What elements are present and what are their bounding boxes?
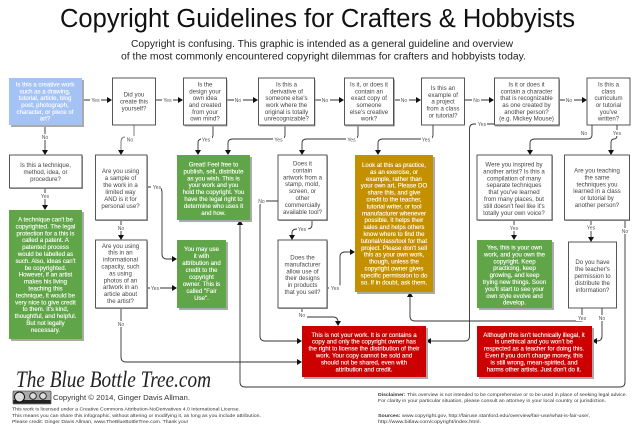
question: informational capacity: capacity, such	[101, 264, 140, 270]
question: informational capacity	[96, 240, 148, 309]
intro text: of the most commonly encountered copyright dilemmas for crafters and hobbyists today.	[121, 52, 526, 62]
gold result: practice: your own art. Please DO	[361, 183, 427, 190]
gold result: practice: copyright owner gives	[365, 266, 423, 272]
question: technique: Is this a technique,	[20, 162, 71, 169]
question: teaching: learned in a class	[573, 188, 621, 195]
connector labels: Yes	[202, 138, 211, 144]
green result: technique: patented process	[22, 244, 69, 251]
green result: your own work: Yes, this is your own	[487, 244, 542, 252]
question: technique: procedure?	[30, 176, 62, 183]
question: sample for personal use	[96, 155, 148, 221]
question: derivative: Is this a	[276, 82, 298, 88]
license text: This means you can share this infographic, without altering or modifying it, as long as you include attribution.	[12, 413, 261, 419]
green result: fair use: You may use	[184, 246, 220, 253]
green result: great: and how.	[201, 210, 226, 217]
connector labels: No	[42, 135, 48, 141]
question: did you create this: yourself?	[122, 106, 147, 112]
question: stamp or mold: artwork from a	[283, 174, 323, 181]
disclaimer: Disclaimer: This overview is not intended to be comprehensive or to be used in place of seeking legal advice.	[378, 392, 627, 398]
question: technique: method, idea, or	[23, 169, 68, 176]
question: inspired: still doesn't feel like it's	[483, 203, 545, 210]
question: own design	[184, 78, 228, 126]
question: manufacturer: allow use of	[286, 268, 319, 275]
connector labels: No	[299, 313, 305, 319]
connector labels: No	[322, 98, 328, 104]
connector labels: Yes	[422, 138, 431, 144]
arrowheads	[42, 97, 614, 365]
green result: your own work: practicing, keep	[493, 265, 536, 272]
start box: creative work: tutorial, article, blog	[19, 95, 71, 102]
disclaimer: For clarity in your particular situation, please consult an attorney in your local country or jurisdiction.	[378, 398, 606, 404]
gold result: practice: Look at this as practice,	[362, 162, 426, 169]
question: inspired: from many places, but	[484, 196, 544, 203]
connector labels: No	[118, 322, 124, 328]
connector labels: No	[118, 226, 124, 232]
question: stamp or mold: available tool?	[283, 209, 323, 216]
gold result: practice: share this, and give	[368, 190, 421, 197]
question: stamp or mold: screen, or	[289, 188, 316, 195]
gold result: practice: as an exercise, or	[370, 169, 418, 176]
license text: This work is licensed under a Creative Commons Attribution-NoDerivatives 4.0 International License.	[12, 406, 240, 412]
red result: not your work: copy and only the copyright owner has	[312, 339, 416, 346]
question: manufacturer: that you sell?	[285, 289, 321, 296]
question: sample for personal use: AND is it for	[104, 196, 137, 203]
question: exact copy: Is it, or does it	[350, 82, 388, 88]
question: recognizable character: (e.g. Mickey Mouse)	[499, 116, 554, 123]
question: exact copy: exact copy of	[351, 95, 387, 102]
question: class curriculum: you've	[600, 109, 618, 116]
red result: unethical	[477, 326, 594, 379]
question: class project	[422, 78, 464, 125]
question: inspired: Were you inspired by	[485, 162, 544, 168]
start box: creative work: art?	[40, 116, 51, 123]
question: own design: design your	[189, 88, 221, 95]
question: sample for personal use: personal use?	[101, 203, 140, 210]
connector labels: No	[581, 131, 587, 137]
green result: technique: be copyrighted.	[25, 265, 67, 272]
question: sample for personal use: limited way	[105, 189, 137, 196]
gold result: practice: possible. It helps their	[365, 217, 423, 224]
question: informational capacity: informational	[103, 257, 138, 264]
license text	[12, 406, 261, 425]
green result: your own work: trying new things. Soon	[483, 279, 546, 286]
connector labels: Yes	[153, 185, 162, 191]
disclaimer	[378, 392, 627, 404]
green result: fair use: copyright	[189, 274, 214, 281]
question: class project: or tutorial?	[429, 112, 458, 119]
red result: unethical: harms other artists. Just don't do it.	[487, 366, 582, 373]
question: derivative: original is totally	[265, 109, 309, 116]
question: did you create this	[112, 78, 156, 125]
question: own design: own idea	[193, 95, 218, 102]
question: informational capacity: artwork in an	[103, 284, 138, 291]
start box: creative work: Is this a creative work	[16, 82, 75, 88]
green result: great: publish, sell, distribute	[184, 168, 244, 175]
question: own design: and created	[189, 102, 221, 109]
question: stamp or mold: Does it	[293, 160, 312, 168]
question: stamp or mold: stamp, mold,	[285, 181, 320, 188]
question: teaching: the same	[584, 174, 610, 181]
question: inspired: that you've learned	[488, 189, 540, 196]
question: exact copy	[344, 78, 395, 126]
question: informational capacity: article about	[104, 291, 137, 298]
connector labels: Yes	[274, 138, 283, 144]
green result: great: Great! Feel free to	[189, 162, 239, 168]
question: teacher permission: permission to	[574, 273, 611, 280]
question: teaching: another person?	[575, 202, 620, 209]
start box: creative work	[9, 78, 84, 127]
sources: Sources: www.copyright.gov, http://fairuse.stanford.edu/overview/fair-use/what-is-fair-use/,	[378, 413, 590, 419]
red result: unethical: respected as a teacher for doing this.	[484, 346, 584, 353]
green result: your own work: growing, and keep	[490, 272, 540, 279]
question: inspired: another artist? Is this a	[483, 168, 545, 175]
connector labels: Yes	[298, 227, 307, 233]
green result: fair use: Use".	[194, 295, 209, 302]
question: recognizable character: that is recognizable	[500, 95, 553, 102]
question: class curriculum: written?	[597, 116, 620, 123]
green result: your own work: develop.	[503, 300, 526, 307]
green result: your own work: own style evolve and	[486, 293, 543, 300]
gold result: practice: know where to find the	[364, 231, 425, 238]
question: manufacturer: Does the	[290, 254, 315, 262]
green result: fair use: credit to the	[186, 267, 218, 274]
question: sample for personal use: the work in a	[103, 182, 138, 189]
red result: not your work	[302, 326, 428, 379]
green result: technique: However, if an artist	[19, 272, 73, 279]
green result: technique: copyrighted. The legal	[16, 223, 75, 230]
question: teaching: or tutorial by	[580, 195, 615, 202]
question: inspired: compilation of many	[487, 175, 542, 182]
connector labels	[40, 97, 629, 328]
question: stamp or mold: other	[296, 195, 309, 202]
green result: technique: called a patent. A	[22, 237, 70, 244]
green result: great	[177, 155, 252, 222]
green result: great: have the legal right to	[184, 196, 243, 203]
question: informational capacity: Are you using	[102, 243, 139, 250]
question: exact copy: work?	[360, 116, 378, 123]
license text: Please credit: Ginger Davis Allman, www.TheBlueBottleTree.com. Thank you!	[12, 419, 188, 425]
question: own design: from your	[192, 109, 218, 116]
question: sample for personal use: a sample of	[105, 175, 137, 182]
red result: not your work: work. Your copy cannot be sold and	[315, 352, 412, 360]
question: stamp or mold	[278, 155, 328, 221]
question: teacher permission: Do you have	[575, 259, 610, 266]
question: teacher permission: information?	[576, 287, 610, 294]
connector labels: No	[258, 199, 265, 205]
connector labels: Yes	[91, 98, 100, 104]
gold result: practice: tutorial/class/tool for that	[361, 238, 427, 245]
green result: your own work: work, and you own the	[483, 251, 546, 258]
green result: great: your work and you	[189, 182, 238, 189]
question: exact copy: else's creative	[350, 109, 389, 116]
connector labels: No	[599, 316, 605, 322]
question: recognizable character	[494, 78, 560, 126]
question: informational capacity: as using	[109, 270, 132, 277]
start box: creative work: post, photograph,	[21, 102, 69, 109]
green result: great: hold the copyright. You	[183, 189, 244, 196]
green result: technique: thoughtful, and helpful.	[15, 313, 77, 320]
green result: technique: such. Also, ideas can't	[15, 258, 76, 265]
sources: http://www.bitlaw.com/copyright/index.html.	[378, 419, 481, 425]
gold result: practice: manufacturer whenever	[362, 210, 426, 217]
question: informational capacity: photos of an	[104, 277, 137, 284]
red result: unethical: Although this isn't technically illegal, it	[483, 332, 585, 339]
question: derivative: unrecognizable?	[264, 116, 309, 123]
green result: fair use: it with	[194, 253, 209, 260]
connector labels: No	[566, 98, 572, 104]
question: class curriculum: class	[602, 88, 615, 95]
question: class project: a project	[431, 99, 455, 106]
gold result: practice: specific permission to do	[361, 272, 428, 279]
question: class project: Is this an	[431, 85, 455, 92]
question: manufacturer: their designs	[285, 275, 320, 282]
question: manufacturer: manufacturer	[285, 261, 320, 268]
green result: technique: protection for a this is	[17, 230, 74, 237]
green result: great: as you wish. This is	[187, 175, 240, 182]
question: recognizable character: another person?	[504, 109, 549, 116]
question: derivative	[258, 78, 316, 126]
gold result: practice: so. If in doubt, ask them.	[361, 279, 428, 286]
connector labels: Yes	[151, 286, 160, 292]
gold result: practice: tutorial writer, or tool	[367, 203, 421, 210]
connector labels: No	[401, 98, 407, 104]
intro text	[121, 39, 526, 62]
question: class project: from a class	[427, 106, 459, 112]
question: class curriculum	[587, 78, 630, 125]
connector labels: Yes	[587, 226, 596, 232]
question: stamp or mold: contain	[293, 167, 312, 174]
green result: fair use: called "Fair	[186, 288, 217, 295]
question: recognizable character: Is it or does it	[508, 82, 545, 88]
green result: technique: technique, it would be	[16, 292, 76, 299]
connector labels: Yes	[578, 316, 587, 322]
question: class curriculum: curriculum	[594, 95, 623, 102]
question: class curriculum: Is this a	[598, 82, 620, 88]
green result: fair use: attribution and	[182, 260, 221, 267]
green result: your own work: you'll start to see your	[485, 286, 544, 293]
green result: your own work	[477, 240, 554, 310]
question: teaching: Are you teaching	[574, 168, 620, 174]
question: derivative: derivative of	[270, 88, 303, 95]
red result: unethical: Even if you don't charge money, this	[485, 352, 583, 360]
icon: creative commons badge	[13, 391, 51, 404]
question: sample for personal use: Are you using	[102, 168, 139, 175]
question: exact copy: someone	[356, 102, 382, 109]
question: inspired: totally your own voice?	[483, 210, 545, 217]
question: derivative: someone else's	[265, 95, 308, 102]
question: teacher permission: the teacher's	[575, 266, 610, 273]
question: class curriculum: or tutorial	[596, 102, 621, 109]
gold result: practice: project. Please don't sell	[361, 245, 427, 252]
question: class project: example of	[428, 92, 458, 99]
red result: unethical: is unethical and you won't be	[495, 339, 574, 346]
question: teaching: techniques you	[576, 181, 618, 188]
gold result: practice: though, unless the	[369, 259, 420, 266]
green result: technique: very nice to give credit	[15, 299, 76, 306]
connector labels: Yes	[613, 131, 622, 137]
logo: The Blue Bottle Tree: The Blue Bottle Tree.com	[16, 367, 211, 392]
question: technique	[10, 155, 83, 189]
connector labels: Yes	[163, 98, 172, 104]
question: own design: Is the	[198, 82, 213, 88]
green result: technique: necessary.	[31, 327, 60, 334]
red result: not your work: This is not your work. It is or contains a	[311, 332, 417, 339]
gold result: practice: this as your own work,	[364, 252, 424, 259]
question: stamp or mold: commercially	[285, 202, 321, 209]
red result: not your work: attribution and credit.	[336, 366, 393, 373]
connector labels: No	[473, 98, 480, 104]
connector labels: No	[235, 98, 241, 104]
question: manufacturer: in products	[288, 282, 317, 289]
question: teaching	[564, 155, 630, 221]
question: inspired: separate techniques	[487, 182, 541, 189]
question: inspired	[477, 155, 553, 221]
red result: not your work: should not be shared, even with	[321, 359, 407, 366]
question: exact copy: contain an	[355, 88, 383, 95]
green result: fair use	[177, 240, 228, 310]
connector labels: No	[127, 138, 133, 144]
question: did you create this: create this	[120, 98, 148, 106]
green result: technique: teaching this	[28, 286, 63, 292]
question: recognizable character: contain a character	[501, 88, 552, 95]
start box: creative work: character, or piece of	[17, 109, 74, 116]
green result: your own work: copyright. Keep	[493, 258, 536, 265]
green result: fair use: owner. This is	[183, 281, 220, 288]
connectors	[45, 100, 625, 387]
red result: unethical: is still wrong, mean-spirited, and	[490, 359, 578, 366]
question: did you create this: Did you	[124, 92, 144, 98]
green result: technique: makes his living	[24, 279, 67, 286]
sources	[378, 413, 590, 425]
connector labels: Yes	[347, 138, 356, 144]
question: derivative: work where the	[265, 102, 308, 109]
question: manufacturer	[278, 240, 328, 309]
green result: technique: A technique can't be	[18, 216, 73, 224]
question: teacher permission	[568, 242, 616, 308]
green result: technique: But not legally	[26, 320, 66, 327]
connector labels: Yes	[478, 122, 487, 128]
gold result: practice	[355, 155, 435, 294]
gold result: practice: sales and helps others	[364, 224, 424, 231]
green result: technique	[9, 210, 84, 341]
start box: creative work: such as a drawing,	[20, 88, 71, 95]
green result: technique: would be labelled as	[17, 251, 73, 258]
connector labels: Yes	[331, 286, 340, 292]
question: informational capacity: the artist?	[107, 298, 134, 305]
question: teacher permission: distribute the	[575, 280, 611, 287]
connector labels: Yes	[41, 194, 50, 200]
connector labels: Yes	[510, 226, 519, 232]
green result: technique: to them. It's kind,	[23, 306, 69, 313]
question: informational capacity: this in an	[108, 250, 133, 257]
green result: great: determine who uses it	[184, 203, 243, 210]
title: Copyright Guidelines for Crafters & Hobbyists	[60, 5, 575, 33]
gold result: practice: credit to the teacher,	[366, 196, 422, 204]
copyright line: Copyright © 2014, Ginger Davis Allman.	[53, 394, 190, 402]
question: recognizable character: as one created by	[502, 102, 552, 109]
connector labels: No	[622, 229, 628, 235]
intro text: Copyright is confusing. This graphic is intended as a general guideline and overview	[131, 39, 514, 50]
red result: not your work: the right to license the distribution of their	[308, 346, 420, 353]
gold result: practice: example, rather than	[366, 176, 422, 183]
question: own design: own mind?	[190, 116, 220, 123]
